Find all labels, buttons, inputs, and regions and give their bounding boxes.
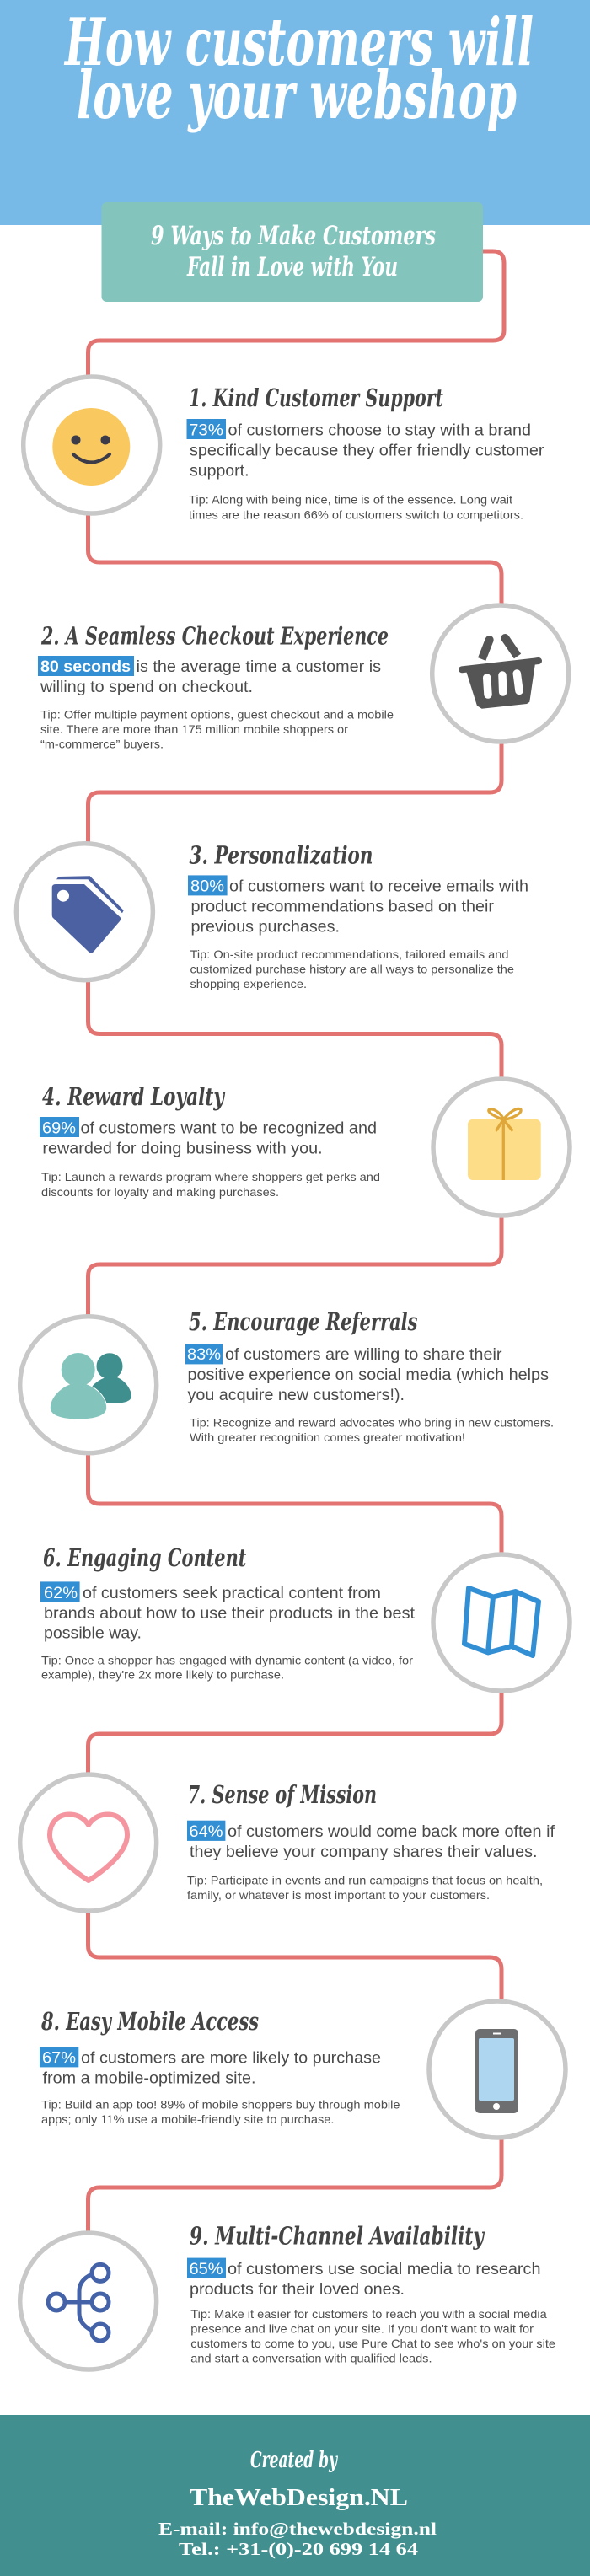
tip: Tip: Offer multiple payment options, guest checkout and a mobile (40, 707, 394, 721)
heading: 7. Sense of Mission (188, 1780, 377, 1809)
stat text: 69% (42, 1119, 76, 1137)
stat text: products for their loved ones. (190, 2281, 405, 2299)
stat text: of customers are more likely to purchase (81, 2050, 381, 2068)
stat text: product recommendations based on their (190, 899, 495, 916)
credit label: Created by (250, 2448, 338, 2473)
tip: site. There are more than 175 million mobile shoppers or (40, 722, 348, 736)
stat text: previous purchases. (190, 919, 340, 936)
stat text: of customers seek practical content from (83, 1585, 381, 1602)
stat text: possible way. (44, 1625, 142, 1643)
stat text: they believe your company shares their values. (190, 1843, 538, 1861)
stat text (187, 419, 544, 480)
tip: Tip: Build an app too! 89% of mobile shoppers buy through mobile (41, 2097, 400, 2111)
stat text (40, 1581, 416, 1643)
contact details: E-mail: info@thewebdesign.nl (158, 2519, 437, 2539)
tip: customized purchase history are all ways to personalize the (190, 963, 514, 976)
tip: Tip: Participate in events and run campaigns that focus on health, (187, 1873, 543, 1886)
panel: 3 personalization (16, 841, 528, 990)
company name: TheWebDesign.NL (190, 2485, 408, 2511)
stat text: 80% (190, 878, 224, 896)
stat text (40, 2047, 381, 2088)
tip: “m-commerce” buyers. (40, 737, 164, 750)
stat text (187, 2258, 541, 2299)
tip: times are the reason 66% of customers switch to competitors. (189, 507, 523, 521)
panel: 4 reward loyalty (40, 1079, 570, 1216)
tip: discounts for loyalty and making purchases. (41, 1185, 279, 1199)
stat text: 62% (44, 1585, 78, 1602)
footer panel (0, 2415, 590, 2576)
stat text: of customers are willing to share their (225, 1346, 502, 1364)
icon: basket (432, 605, 569, 742)
tip (190, 1416, 554, 1444)
panel: 2 seamless checkout (38, 605, 569, 750)
tip: apps; only 11% use a mobile-friendly site to purchase. (41, 2112, 334, 2126)
tip: Tip: Make it easier for customers to reach you with a social media (190, 2307, 547, 2321)
stat text: of customers would come back more often if (228, 1823, 555, 1841)
tip: presence and live chat on your site. If you don't want to wait for (190, 2321, 534, 2335)
icon: smiley (24, 377, 160, 513)
heading: 3. Personalization (189, 841, 373, 870)
connector line (88, 251, 504, 2276)
heading: 6. Engaging Content (43, 1543, 247, 1572)
stat text: of customers want to receive emails with (229, 878, 528, 896)
tip: example), they're 2x more likely to purchase. (41, 1668, 284, 1682)
tip (187, 1873, 543, 1902)
stat text: of customers use social media to research (228, 2261, 541, 2278)
tip: Tip: Once a shopper has engaged with dynamic content (a video, for (41, 1654, 413, 1667)
stat text (40, 1117, 377, 1157)
panel: 1 kind customer support (24, 377, 544, 521)
tip: shopping experience. (190, 977, 307, 990)
subtitle panel: Fall in Love with You (186, 252, 398, 282)
icon: people (20, 1317, 157, 1453)
panel: 5 encourage referrals (20, 1307, 554, 1453)
stat text: brands about how to use their products in the best (44, 1605, 416, 1623)
stat text: from a mobile-optimized site. (42, 2070, 256, 2088)
stat text: 65% (189, 2261, 223, 2278)
panel: 9 multi-channel availability (20, 2222, 555, 2369)
tip: Tip: Along with being nice, time is of the essence. Long wait (189, 493, 512, 507)
stat text: 67% (42, 2050, 76, 2068)
tip: Tip: Recognize and reward advocates who bring in new customers. (190, 1416, 554, 1430)
title (64, 4, 534, 134)
tip: Tip: On-site product recommendations, tailored emails and (190, 947, 509, 961)
tip: and start a conversation with qualified leads. (190, 2351, 432, 2364)
stat text: is the average time a customer is (137, 658, 381, 676)
tip (41, 1170, 380, 1199)
tip: customers to come to you, use Pure Chat to see who's on your site (190, 2337, 555, 2350)
heading: 9. Multi-Channel Availability (190, 2222, 485, 2251)
tip (40, 707, 394, 750)
stat text (38, 656, 381, 696)
tip (41, 2097, 400, 2126)
tip (41, 1654, 413, 1682)
heading: 8. Easy Mobile Access (40, 2007, 259, 2036)
icon: gift (433, 1079, 570, 1216)
tip: With greater recognition comes greater motivation! (190, 1430, 465, 1444)
stat text (188, 875, 528, 936)
subtitle panel: 9 Ways to Make Customers (151, 221, 436, 251)
stat text (187, 1821, 555, 1861)
heading: 4. Reward Loyalty (42, 1082, 226, 1111)
tip (189, 493, 523, 521)
contact details: Tel.: +31-(0)-20 699 14 64 (179, 2539, 419, 2559)
stat text (185, 1344, 549, 1404)
stat text: support. (190, 462, 249, 480)
stat text: willing to spend on checkout. (40, 679, 253, 696)
stat text: of customers choose to stay with a brand (228, 421, 531, 440)
icon: heart (20, 1774, 157, 1911)
stat text: rewarded for doing business with you. (42, 1140, 323, 1157)
heading: 1. Kind Customer Support (189, 384, 443, 412)
panel: 6 engaging content (40, 1543, 570, 1691)
stat text: 73% (189, 421, 223, 440)
tip: Tip: Launch a rewards program where shoppers get perks and (41, 1170, 380, 1183)
stat text: 80 seconds (40, 658, 131, 676)
header band (0, 0, 590, 225)
stat text: 83% (187, 1346, 221, 1364)
icon: price tag (16, 844, 153, 980)
tip (190, 2307, 555, 2364)
stat text: of customers want to be recognized and (81, 1119, 377, 1137)
stat text: specifically because they offer friendly customer (190, 442, 544, 459)
stat text: positive experience on social media (which helps (187, 1366, 549, 1384)
icon: network (20, 2233, 157, 2369)
icon: phone (429, 2001, 566, 2138)
heading: 5. Encourage Referrals (189, 1307, 418, 1336)
panel: 7 sense of mission (20, 1774, 555, 1911)
stat text: 64% (189, 1823, 223, 1841)
contact details (158, 2519, 437, 2559)
subtitle panel (101, 202, 483, 302)
stat text: you acquire new customers!). (187, 1387, 405, 1404)
icon: map (433, 1554, 570, 1691)
tip (190, 947, 514, 990)
heading: 2. A Seamless Checkout Experience (40, 621, 389, 650)
tip: family, or whatever is most important to your customers. (187, 1888, 490, 1902)
panel: 8 easy mobile access (40, 2001, 566, 2138)
